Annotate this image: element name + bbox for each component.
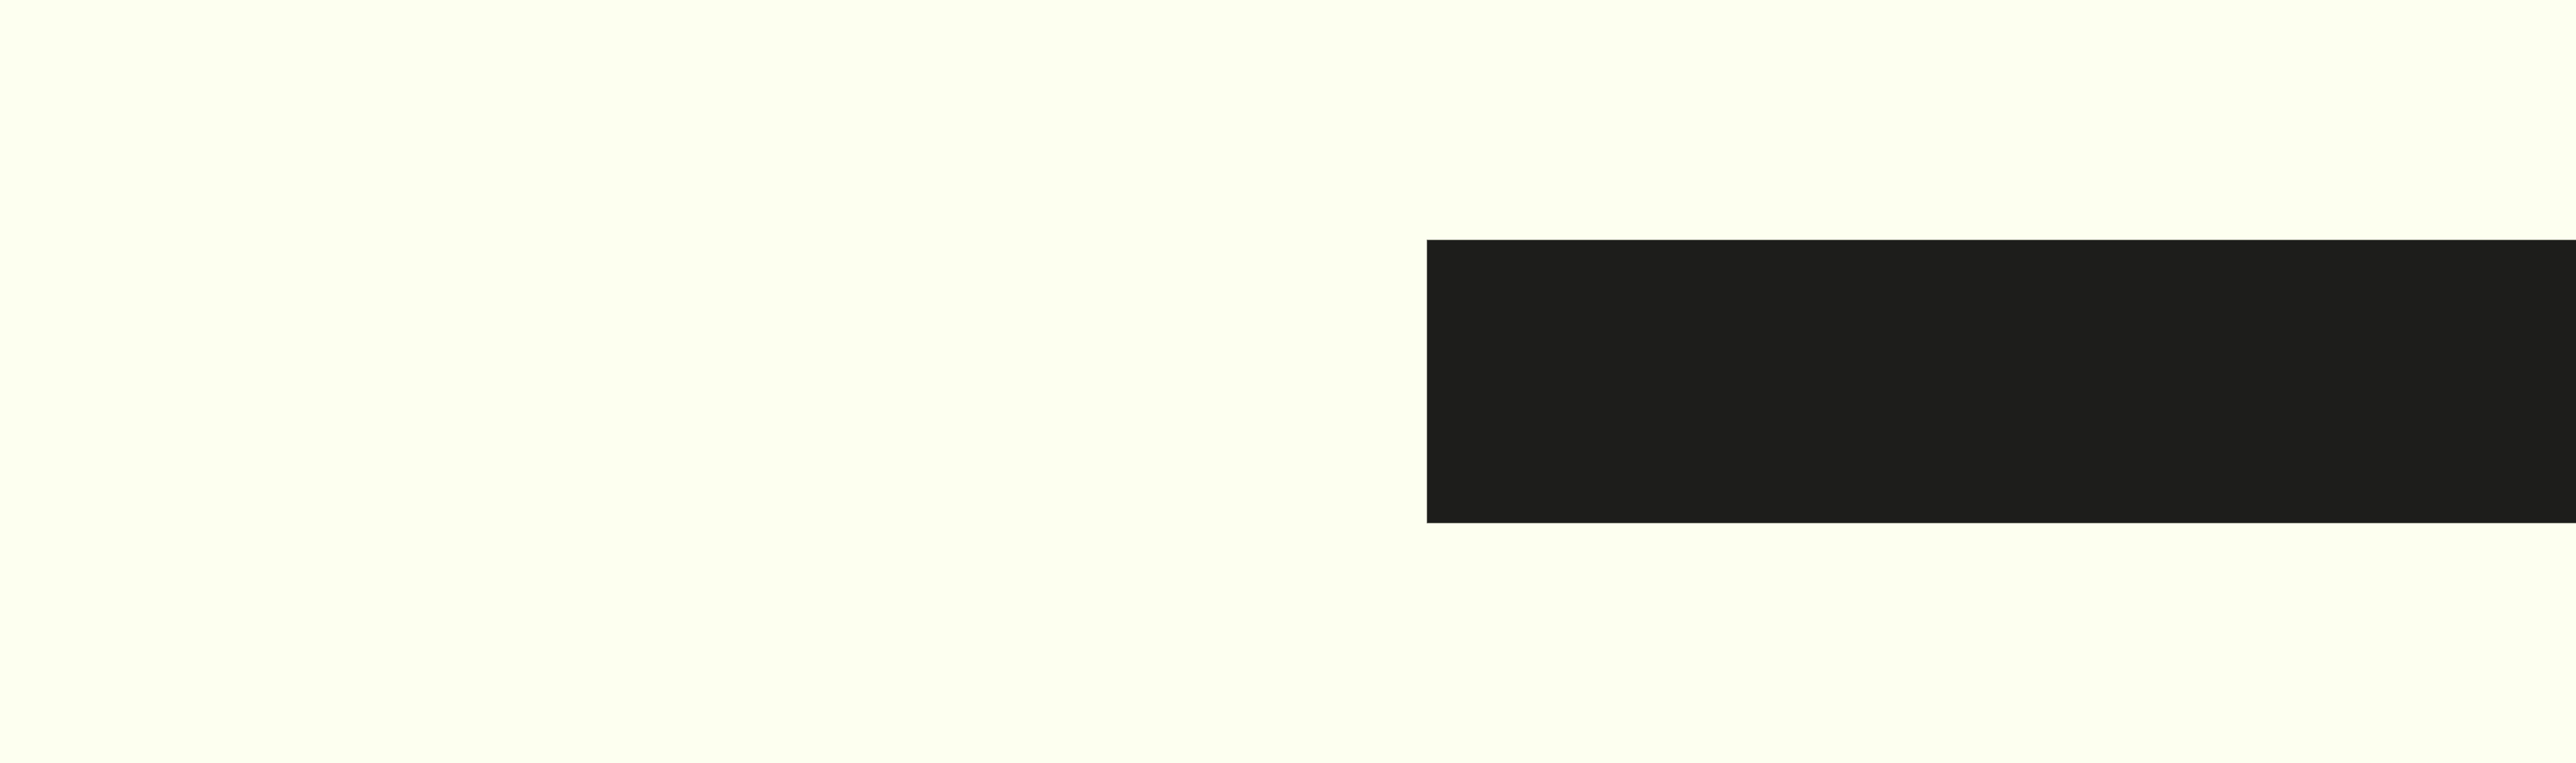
- panel: dark rectangle: [1427, 240, 2576, 523]
